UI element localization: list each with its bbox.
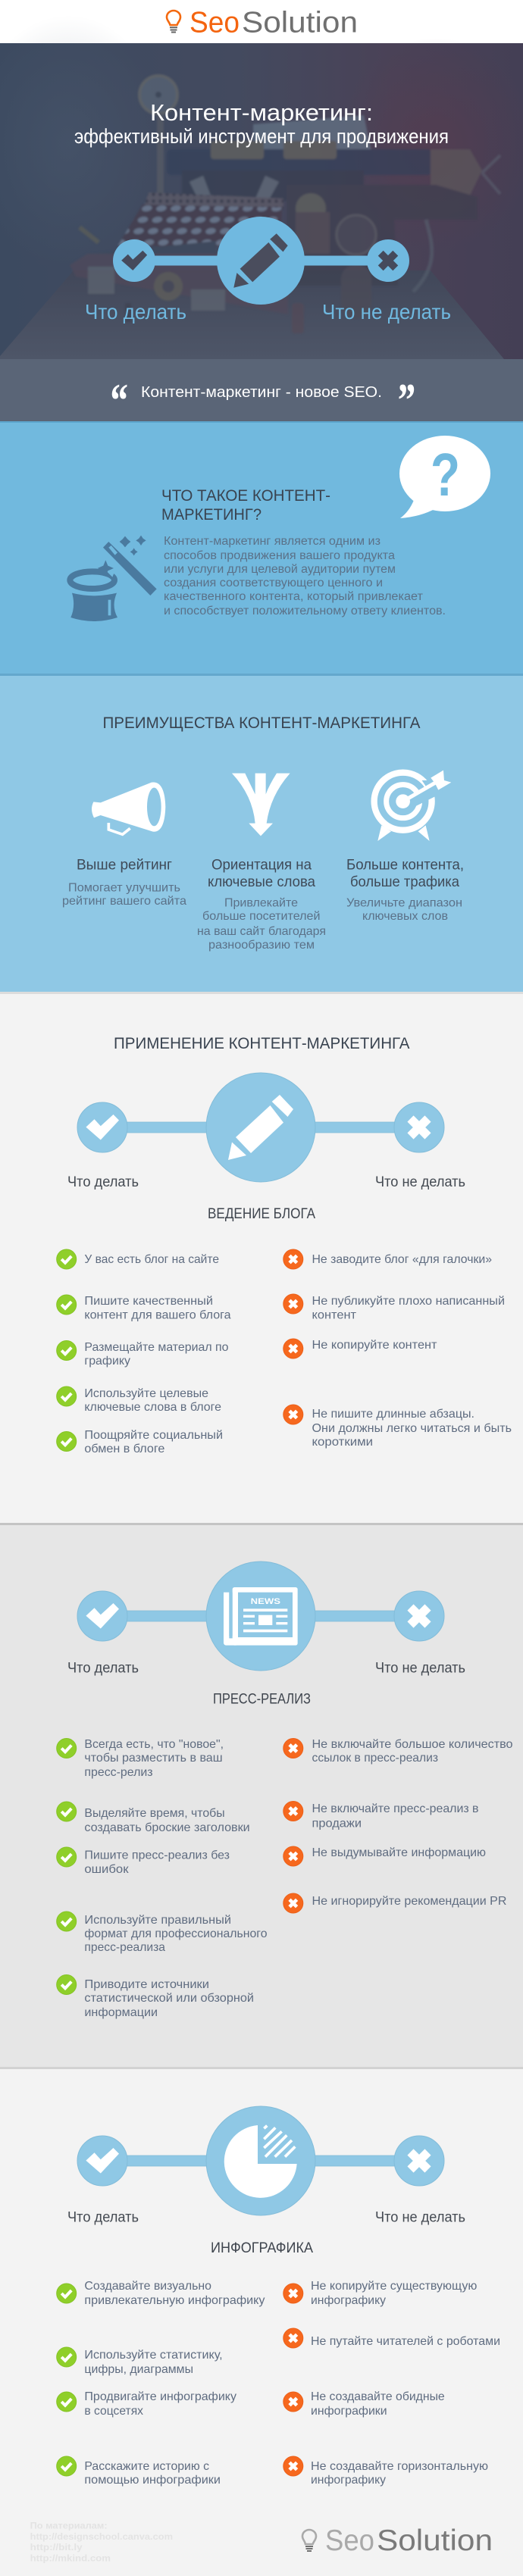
icon: pencil xyxy=(228,1095,293,1160)
don't item: Не копируйте существующую xyxy=(311,2280,477,2293)
logo wordmark: Seo xyxy=(189,6,240,39)
logo wordmark xyxy=(189,6,358,39)
don't item: Не путайте читателей с роботами xyxy=(311,2335,500,2348)
description text: или услуги для целевой аудитории путем xyxy=(164,563,396,576)
hero label: don't: Что не делать xyxy=(322,300,451,324)
do item xyxy=(57,1912,268,1954)
do item: Пишите качественный xyxy=(84,1295,213,1308)
don't item xyxy=(283,1339,437,1358)
description text: и способствует положительному ответу клиентов. xyxy=(164,605,446,617)
don't item xyxy=(283,1893,506,1913)
opening quote mark: “ xyxy=(108,375,127,427)
don't item: Не игнорируйте рекомендации PR xyxy=(312,1895,506,1908)
don't item: инфографику xyxy=(311,2294,386,2307)
do item: Используйте правильный xyxy=(84,1914,231,1927)
sources xyxy=(30,2520,173,2564)
footer logo: Seo xyxy=(325,2524,374,2557)
description text: качественного контента, который привлекает xyxy=(164,590,423,603)
icon: cross xyxy=(411,2152,427,2170)
press release diagram xyxy=(77,1562,444,1671)
benefit: more content: Больше контента, xyxy=(346,856,464,873)
don't item: Не создавайте обидные xyxy=(311,2390,445,2403)
hero do / don't diagram xyxy=(113,217,409,305)
don't item: инфографики xyxy=(311,2405,387,2418)
icon: check xyxy=(121,251,147,270)
don't item: Не копируйте контент xyxy=(312,1339,437,1352)
do item: контент для вашего блога xyxy=(84,1309,231,1321)
icon: pencil xyxy=(233,233,288,288)
benefit: more content: ключевых слов xyxy=(362,910,448,923)
benefit: higher rating: рейтинг вашего сайта xyxy=(62,895,186,908)
do item: Приводите источники xyxy=(84,1978,209,1991)
description text: создания соответствующего ценного и xyxy=(164,577,383,589)
benefit: keyword focus: Ориентация на xyxy=(211,856,312,873)
do item: Используйте целевые xyxy=(84,1387,208,1400)
do item: Всегда есть, что "новое", xyxy=(84,1738,224,1751)
benefit: more content: больше трафика xyxy=(350,874,459,890)
table xyxy=(0,270,504,359)
don't item: Они должны легко читаться и быть xyxy=(312,1422,512,1435)
do item xyxy=(57,1341,229,1368)
don't item xyxy=(283,1738,513,1765)
icon: check xyxy=(86,2148,119,2173)
don't item xyxy=(283,2328,500,2348)
icon: speech bubble with question: ? xyxy=(431,441,460,508)
do item xyxy=(57,1802,250,1834)
icon: grey light bulb xyxy=(302,2530,316,2551)
description text xyxy=(164,535,446,617)
do item: Пишите пресс-реализ без xyxy=(84,1849,230,1862)
label: do: Что делать xyxy=(67,1661,139,1676)
subheading: ИНФОГРАФИКА xyxy=(211,2240,313,2256)
don't item: инфографику xyxy=(311,2474,386,2487)
benefit: more content xyxy=(346,856,464,923)
icon: check xyxy=(86,1114,119,1140)
icon: orange light bulb xyxy=(167,11,180,32)
do item: Продвигайте инфографику xyxy=(84,2390,236,2403)
label: do: Что делать xyxy=(67,2209,139,2226)
don't item xyxy=(283,2390,445,2418)
don't item xyxy=(283,2280,477,2307)
don't item: Не выдумывайте информацию xyxy=(312,1846,486,1859)
heading: ПРЕИМУЩЕСТВА КОНТЕНТ-МАРКЕТИНГА xyxy=(103,714,420,732)
do item: привлекательную инфографику xyxy=(84,2294,265,2307)
icon: target with arrow xyxy=(374,771,451,841)
do item: ключевые слова в блоге xyxy=(84,1401,221,1414)
do item: Поощряйте социальный xyxy=(84,1429,223,1442)
icon: cross xyxy=(411,1118,427,1136)
sources: http://bit.ly xyxy=(30,2542,83,2553)
do item: информации xyxy=(84,2006,158,2019)
do item xyxy=(57,1429,223,1455)
do item xyxy=(57,1295,231,1321)
sources: http://mkind.com xyxy=(30,2553,111,2564)
panel: hero with typewriter xyxy=(0,15,523,359)
don't item: продажи xyxy=(312,1817,362,1830)
icon: pie chart xyxy=(224,2125,297,2198)
benefit: keyword focus: ключевые слова xyxy=(208,874,315,890)
blog diagram xyxy=(77,1073,444,1182)
icon: cross xyxy=(411,1608,427,1624)
do item xyxy=(57,2456,221,2487)
typewriter illustration xyxy=(70,76,500,333)
do item xyxy=(57,1738,224,1779)
label: don't: Что не делать xyxy=(375,1661,465,1676)
don't item xyxy=(283,1802,479,1830)
don't item xyxy=(283,1294,505,1321)
do item: ошибок xyxy=(84,1863,130,1876)
do item xyxy=(57,1386,221,1414)
do item: цифры, диаграммы xyxy=(84,2363,193,2376)
benefit: keyword focus: разнообразию тем xyxy=(208,939,315,952)
do item xyxy=(57,1847,230,1876)
benefit: higher rating: Выше рейтинг xyxy=(77,856,172,873)
don't item: короткими xyxy=(312,1436,373,1449)
hero label: do: Что делать xyxy=(85,300,186,324)
panel: blogging xyxy=(0,992,523,1524)
icon: cross xyxy=(381,253,396,268)
do item xyxy=(57,1974,254,2019)
don't item xyxy=(283,2456,488,2487)
panel: press release xyxy=(0,1523,523,2068)
heading xyxy=(161,487,330,524)
don't item: Не публикуйте плохо написанный xyxy=(312,1295,505,1308)
label: don't: Что не делать xyxy=(375,1174,465,1190)
subheading: ПРЕСС-РЕАЛИЗ xyxy=(213,1691,311,1708)
don't item xyxy=(283,1405,512,1449)
do item: Выделяйте время, чтобы xyxy=(84,1807,225,1820)
label: do: Что делать xyxy=(67,1174,139,1190)
don't item xyxy=(283,1249,492,1269)
footer logo: Solution xyxy=(377,2524,493,2557)
label: don't: Что не делать xyxy=(375,2209,465,2226)
panel: what is content marketing xyxy=(0,421,523,675)
icon: speech bubble with question xyxy=(399,436,490,518)
heading: ЧТО ТАКОЕ КОНТЕНТ- xyxy=(161,487,330,505)
heading: МАРКЕТИНГ? xyxy=(161,506,262,524)
benefit: higher rating xyxy=(62,856,186,908)
do item: пресс-реализа xyxy=(84,1941,165,1954)
do item xyxy=(57,2390,236,2418)
do item: формат для профессионального xyxy=(84,1927,268,1940)
sources: По материалам: xyxy=(30,2520,108,2531)
hero title: Контент-маркетинг: xyxy=(150,99,373,126)
do item: чтобы разместить в ваш xyxy=(84,1752,223,1765)
heading: ПРИМЕНЕНИЕ КОНТЕНТ-МАРКЕТИНГА xyxy=(114,1035,409,1052)
icon: newspaper xyxy=(224,1587,298,1646)
do item: Размещайте материал по xyxy=(84,1341,229,1354)
don't item: контент xyxy=(312,1309,357,1321)
benefit: keyword focus: на ваш сайт благодаря xyxy=(197,925,326,938)
closing quote mark: ” xyxy=(396,375,415,427)
do item xyxy=(57,2280,265,2307)
benefit: keyword focus xyxy=(197,856,326,952)
do item: помощью инфографики xyxy=(84,2474,221,2487)
sources: http://designschool.canva.com xyxy=(30,2531,173,2542)
benefit: keyword focus: Привлекайте xyxy=(224,897,298,909)
panel: quote bar xyxy=(0,359,523,427)
icon: newspaper: NEWS xyxy=(251,1597,280,1606)
subheading: ВЕДЕНИЕ БЛОГА xyxy=(208,1205,315,1222)
panel: benefits xyxy=(0,674,523,992)
do item: Расскажите историю с xyxy=(84,2460,209,2473)
don't item: Не пишите длинные абзацы. xyxy=(312,1408,474,1421)
do item: У вас есть блог на сайте xyxy=(84,1253,219,1266)
do item xyxy=(57,2347,223,2376)
icon: megaphone xyxy=(92,782,165,834)
icon: magic hat and wand xyxy=(70,536,157,621)
hero title xyxy=(74,99,449,148)
do item: Используйте статистику, xyxy=(84,2349,223,2362)
do item: обмен в блоге xyxy=(84,1443,165,1455)
panel: infographics xyxy=(0,2067,523,2576)
don't item: ссылок в пресс-реализ xyxy=(312,1752,438,1765)
description text: Контент-маркетинг является одним из xyxy=(164,535,381,548)
logo wordmark: Solution xyxy=(242,6,358,39)
hero title: эффективный инструмент для продвижения xyxy=(74,125,449,148)
do item xyxy=(57,1249,219,1269)
do item: графику xyxy=(84,1355,130,1368)
quote text: Контент-маркетинг - новое SEO. xyxy=(141,383,382,401)
benefit: higher rating: Помогает улучшить xyxy=(68,882,180,894)
benefit: more content: Увеличьте диапазон xyxy=(346,897,462,909)
footer logo xyxy=(302,2524,493,2557)
don't item: Не создавайте горизонтальную xyxy=(311,2460,488,2473)
do item: создавать броские заголовки xyxy=(84,1821,250,1834)
description text: способов продвижения вашего продукта xyxy=(164,549,395,562)
infographic diagram xyxy=(77,2106,444,2215)
do item: пресс-релиз xyxy=(84,1766,153,1779)
don't item: Не заводите блог «для галочки» xyxy=(312,1253,492,1266)
do item: статистической или обзорной xyxy=(84,1992,254,2005)
don't item: Не включайте пресс-реализ в xyxy=(312,1802,479,1815)
icon: check xyxy=(86,1603,119,1629)
do item: в соцсетях xyxy=(84,2405,143,2418)
benefit: keyword focus: больше посетителей xyxy=(202,910,320,923)
do item: Создавайте визуально xyxy=(84,2280,211,2293)
don't item: Не включайте большое количество xyxy=(312,1738,513,1751)
icon: merging arrows xyxy=(232,774,290,836)
don't item xyxy=(283,1846,486,1866)
header: logo bar xyxy=(0,0,523,43)
